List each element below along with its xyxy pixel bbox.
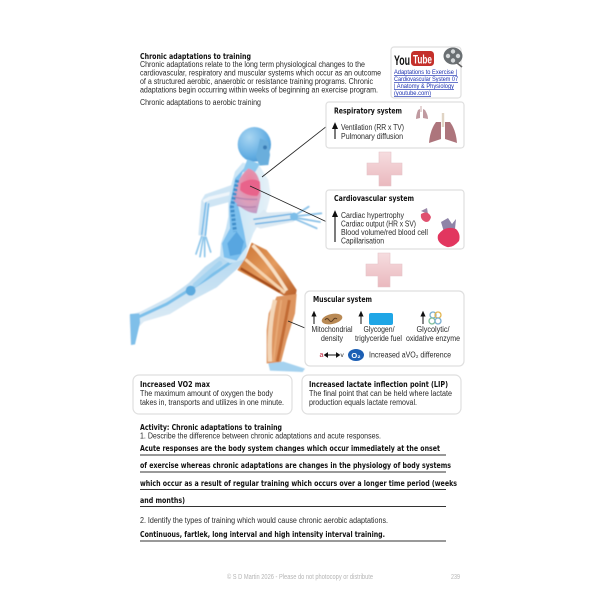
- cardiovascular list: Cardiac output (HR x SV): [341, 220, 416, 228]
- cardiovascular list: [341, 211, 428, 246]
- intro paragraph: adaptations begin occurring within weeks of beginning an exercise program.: [140, 86, 378, 94]
- video link text: Cardiovascular System 07: [394, 76, 458, 83]
- heading: cardiovascular system: Cardiovascular system: [334, 194, 414, 203]
- activity section: [140, 423, 457, 541]
- thigh muscles: [237, 243, 297, 297]
- answer 1: Acute responses are the body system changes which occur immediately at the onset: [140, 444, 440, 453]
- mitochondrial density label: density: [321, 334, 343, 343]
- respiratory list: Pulmonary diffusion: [341, 132, 403, 141]
- question 1: 1. Describe the difference between chronic adaptations and acute responses.: [140, 432, 381, 440]
- front foot: [268, 362, 305, 372]
- heading: muscular system: Muscular system: [313, 295, 372, 304]
- answer 1: [140, 444, 457, 506]
- glycogen label: Glycogen/: [364, 325, 395, 334]
- arrow: increase: [333, 212, 337, 242]
- panel: increased lactate inflection point: The final point that can be held where lactate: [309, 389, 453, 398]
- panel: increased VO2 max: The maximum amount of oxygen the body: [140, 389, 273, 398]
- glycolytic label: Glycolytic/: [416, 325, 450, 334]
- a-v arrow: a: [320, 352, 324, 359]
- shin muscles: [267, 294, 297, 363]
- head: [238, 127, 271, 162]
- arrow: mitochondria increase: [312, 312, 316, 324]
- video link text: | Anatomy & Physiology: [394, 83, 455, 90]
- icon: film reel: [444, 48, 462, 67]
- arrow: increase: [333, 124, 337, 139]
- mitochondrial density label: [312, 325, 353, 343]
- footer: copyright: © S D Martin 2026 - Please do not photocopy or distribute: [227, 573, 373, 581]
- intro paragraph: of a structured aerobic, anaerobic or resistance training programs. Chronic: [140, 77, 373, 86]
- a-v arrow: v: [340, 352, 344, 359]
- spine: [232, 180, 237, 232]
- icon: oxygen: [348, 349, 364, 361]
- icon: small lungs: [416, 106, 428, 119]
- icon: mitochondrion: [321, 312, 343, 326]
- heading: chronic adaptations to training: Chronic adaptations to training: [140, 52, 251, 61]
- heading: respiratory system: Respiratory system: [334, 106, 402, 116]
- icon: large heart: [438, 218, 460, 247]
- icon: youtube logo: Tube: [413, 52, 432, 66]
- illustration: running figure: [129, 127, 321, 372]
- panel: increased lactate inflection point: [302, 375, 461, 414]
- panel: muscular system: [305, 291, 464, 366]
- respiratory list: Ventilation (RR x TV): [341, 123, 404, 132]
- front hand: [294, 207, 321, 228]
- intro paragraph: [140, 60, 382, 94]
- aVO2 label: Increased aVO₂ difference: [369, 350, 452, 360]
- cardiovascular list: Blood volume/red blood cell: [341, 228, 428, 237]
- answer 1: of exercise whereas chronic adaptations are changes in the physiology of body systems: [140, 461, 451, 470]
- torso: [220, 163, 271, 263]
- icon: glycogen cylinder: [369, 313, 393, 325]
- connector: leg to muscular system: [288, 321, 305, 328]
- panel: increased VO2 max: takes in, transports and utilizes in one minute.: [140, 398, 284, 407]
- answer 2: Continuous, fartlek, long interval and high intensity interval training.: [140, 530, 385, 539]
- icon: enzyme: [429, 312, 441, 324]
- panel: increased VO2 max: Increased VO2 max: [140, 380, 211, 389]
- panel: respiratory system: [326, 102, 464, 148]
- subheading: aerobic training: Chronic adaptations to aerobic training: [140, 98, 261, 107]
- icon: oxygen: O₂: [351, 351, 361, 360]
- icon: youtube logo: You: [394, 52, 410, 68]
- icon: small heart: [421, 208, 431, 222]
- video link text: (youtube.com): [394, 90, 431, 97]
- back arm: [198, 185, 232, 237]
- footer: page number: 239: [451, 574, 460, 581]
- panel: increased VO2 max: [133, 375, 292, 414]
- back hand: [196, 237, 211, 257]
- lungs: [233, 168, 261, 213]
- cardiovascular list: Cardiac hypertrophy: [341, 211, 404, 220]
- answer 1: which occur as a result of regular training which occurs over a longer time period (weeks: [140, 479, 457, 488]
- connector: heart to cardiovascular system: [250, 186, 327, 222]
- glycogen label: [355, 325, 402, 343]
- arrow: glycolytic increase: [421, 312, 425, 324]
- icon: plus sign: [367, 152, 402, 186]
- panel: increased lactate inflection point: production equals lactate removal.: [309, 398, 417, 407]
- glycogen label: triglyceride fuel: [355, 334, 402, 343]
- mitochondrial density label: Mitochondrial: [312, 325, 353, 334]
- glycolytic label: [406, 325, 461, 343]
- back leg: [129, 256, 246, 345]
- front arm: [248, 209, 294, 229]
- arrow: glycogen increase: [359, 312, 363, 324]
- respiratory list: [341, 123, 404, 141]
- question 2: 2. Identify the types of training which would cause chronic aerobic adaptations.: [140, 516, 388, 525]
- panel: youtube link: [391, 47, 462, 98]
- glycolytic label: oxidative enzyme: [406, 334, 461, 343]
- activity heading: Activity: Chronic adaptations to training: [140, 423, 282, 432]
- icon: large lungs: [429, 113, 457, 143]
- intro paragraph: cardiovascular, respiratory and muscular systems which occur as an outcome: [140, 68, 382, 78]
- panel: cardiovascular system: [326, 190, 464, 249]
- video link text: [394, 69, 458, 97]
- panel: increased lactate inflection point: Increased lactate inflection point (LIP): [309, 380, 448, 389]
- cardiovascular list: Capillarisation: [341, 236, 384, 246]
- intro paragraph: Chronic adaptations relate to the long term physiological changes to the: [140, 60, 366, 69]
- icon: plus sign: [366, 253, 402, 287]
- answer 1: and months): [140, 496, 185, 505]
- icon: youtube logo: [394, 51, 434, 68]
- connector: lungs to respiratory system: [262, 126, 327, 177]
- video link text: Adaptations to Exercise |: [394, 69, 457, 76]
- a-v arrow: [320, 352, 344, 359]
